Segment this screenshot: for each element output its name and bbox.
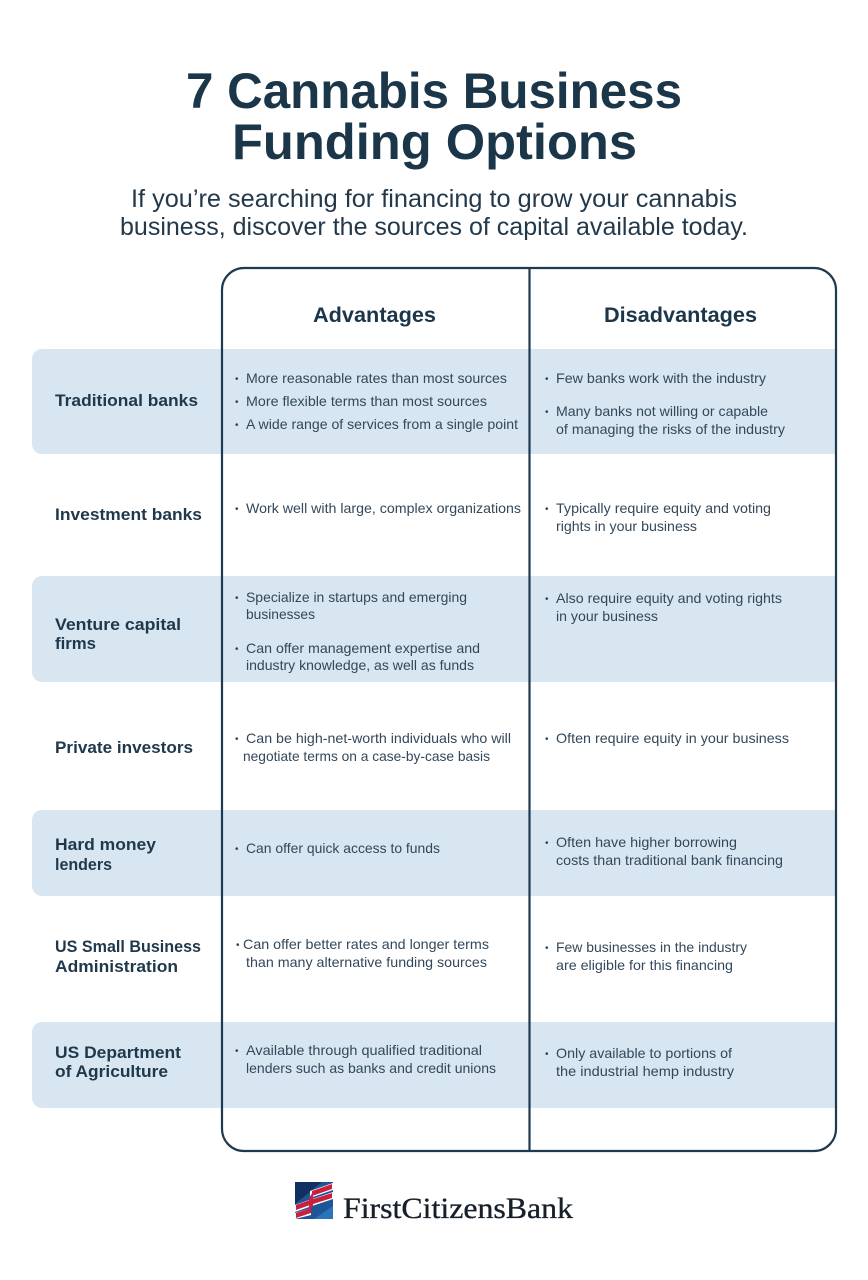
logo: First Citizens Bank: FirstCitizensBank [343, 1192, 573, 1225]
row band: venture capital firms [32, 576, 835, 682]
row: US Department of Agriculture: of Agriculture [55, 1063, 168, 1081]
row: US Small Business Administration: • [236, 940, 240, 951]
row: traditional banks: More flexible terms than most sources [246, 394, 487, 409]
row: US Small Business Administration: Can offer better rates and longer terms [243, 937, 489, 952]
row: traditional banks: • [545, 374, 549, 385]
row: US Department of Agriculture: • [235, 1046, 239, 1057]
row: hard money lenders: Hard money [55, 836, 157, 854]
row: venture capital firms: Can offer management expertise and [246, 641, 480, 656]
row: hard money lenders: Often have higher borrowing [556, 835, 737, 850]
row: venture capital firms: businesses [246, 607, 315, 622]
row: traditional banks: • [545, 407, 549, 418]
row: venture capital firms: industry knowledge, as well as funds [246, 658, 474, 673]
row: venture capital firms: • [545, 594, 549, 605]
row: hard money lenders: lenders [55, 856, 112, 874]
row: private investors: Often require equity in your business [556, 731, 789, 746]
heading: disadvantages: Disadvantages [604, 303, 757, 327]
row: traditional banks: A wide range of services from a single point [246, 417, 518, 432]
subtitle: business, discover the sources of capital available today. [120, 213, 748, 241]
logo: First Citizens Bank [295, 1182, 573, 1225]
row: traditional banks: Traditional banks [55, 392, 198, 410]
row: investment banks [55, 501, 771, 534]
row: traditional banks: • [235, 420, 239, 431]
row: US Department of Agriculture: • [545, 1049, 549, 1060]
row: private investors [55, 731, 789, 764]
subtitle [120, 185, 748, 241]
row: venture capital firms: • [235, 644, 239, 655]
subtitle: If you’re searching for financing to grow your cannabis [131, 185, 737, 213]
row: private investors: Private investors [55, 739, 193, 757]
row: traditional banks: Many banks not willing or capable [556, 404, 768, 419]
row: hard money lenders: • [235, 844, 239, 855]
row: hard money lenders: costs than traditional bank financing [556, 853, 783, 868]
row: investment banks: • [545, 504, 549, 515]
row band: hard money lenders [32, 810, 835, 896]
row: traditional banks: of managing the risks of the industry [556, 422, 785, 437]
row: venture capital firms: Specialize in startups and emerging [246, 590, 467, 605]
row: US Department of Agriculture: the industrial hemp industry [556, 1064, 734, 1079]
row: venture capital firms: Venture capital [55, 616, 181, 634]
row: US Department of Agriculture: Available through qualified traditional [246, 1043, 482, 1058]
row: traditional banks: • [235, 397, 239, 408]
row: investment banks: Work well with large, complex organizations [246, 501, 521, 516]
row: US Small Business Administration [55, 937, 747, 976]
row: venture capital firms: Also require equity and voting rights [556, 591, 782, 606]
table outline [222, 268, 836, 1151]
row: private investors: • [235, 734, 239, 745]
row band: US Department of Agriculture [32, 1022, 835, 1108]
row: US Small Business Administration: than many alternative funding sources [246, 955, 487, 970]
row: US Small Business Administration: US Small Business [55, 938, 201, 956]
row: investment banks: Typically require equity and voting [556, 501, 771, 516]
row: US Small Business Administration: • [545, 943, 549, 954]
row: private investors: negotiate terms on a case-by-case basis [243, 749, 490, 764]
row: US Small Business Administration: Few businesses in the industry [556, 940, 747, 955]
row: venture capital firms: • [235, 593, 239, 604]
heading: advantages: Advantages [313, 303, 436, 327]
row: investment banks: Investment banks [55, 506, 202, 524]
row: traditional banks: More reasonable rates than most sources [246, 371, 507, 386]
row: hard money lenders: • [545, 838, 549, 849]
row: hard money lenders: Can offer quick access to funds [246, 841, 440, 856]
row: US Small Business Administration: Administration [55, 958, 178, 976]
row: US Department of Agriculture: US Department [55, 1044, 182, 1062]
row: venture capital firms [55, 590, 782, 673]
row: hard money lenders [55, 835, 783, 874]
row: private investors: Can be high-net-worth individuals who will [246, 731, 511, 746]
row: private investors: • [545, 734, 549, 745]
title: Funding Options [232, 114, 637, 170]
row: venture capital firms: firms [55, 635, 96, 653]
row: US Department of Agriculture: Only available to portions of [556, 1046, 732, 1061]
row: venture capital firms: in your business [556, 609, 658, 624]
title: 7 Cannabis Business [186, 63, 682, 119]
icon: bank flag [295, 1182, 333, 1219]
title [186, 63, 682, 170]
row: US Small Business Administration: are eligible for this financing [556, 958, 733, 973]
row: investment banks: • [235, 504, 239, 515]
row: traditional banks: • [235, 374, 239, 385]
row: US Department of Agriculture [55, 1043, 734, 1081]
row band: traditional banks [32, 349, 835, 454]
column divider [528, 268, 531, 1151]
row: traditional banks [55, 371, 785, 437]
row: US Department of Agriculture: lenders such as banks and credit unions [246, 1061, 496, 1076]
row: investment banks: rights in your business [556, 519, 697, 534]
row: traditional banks: Few banks work with the industry [556, 371, 766, 386]
